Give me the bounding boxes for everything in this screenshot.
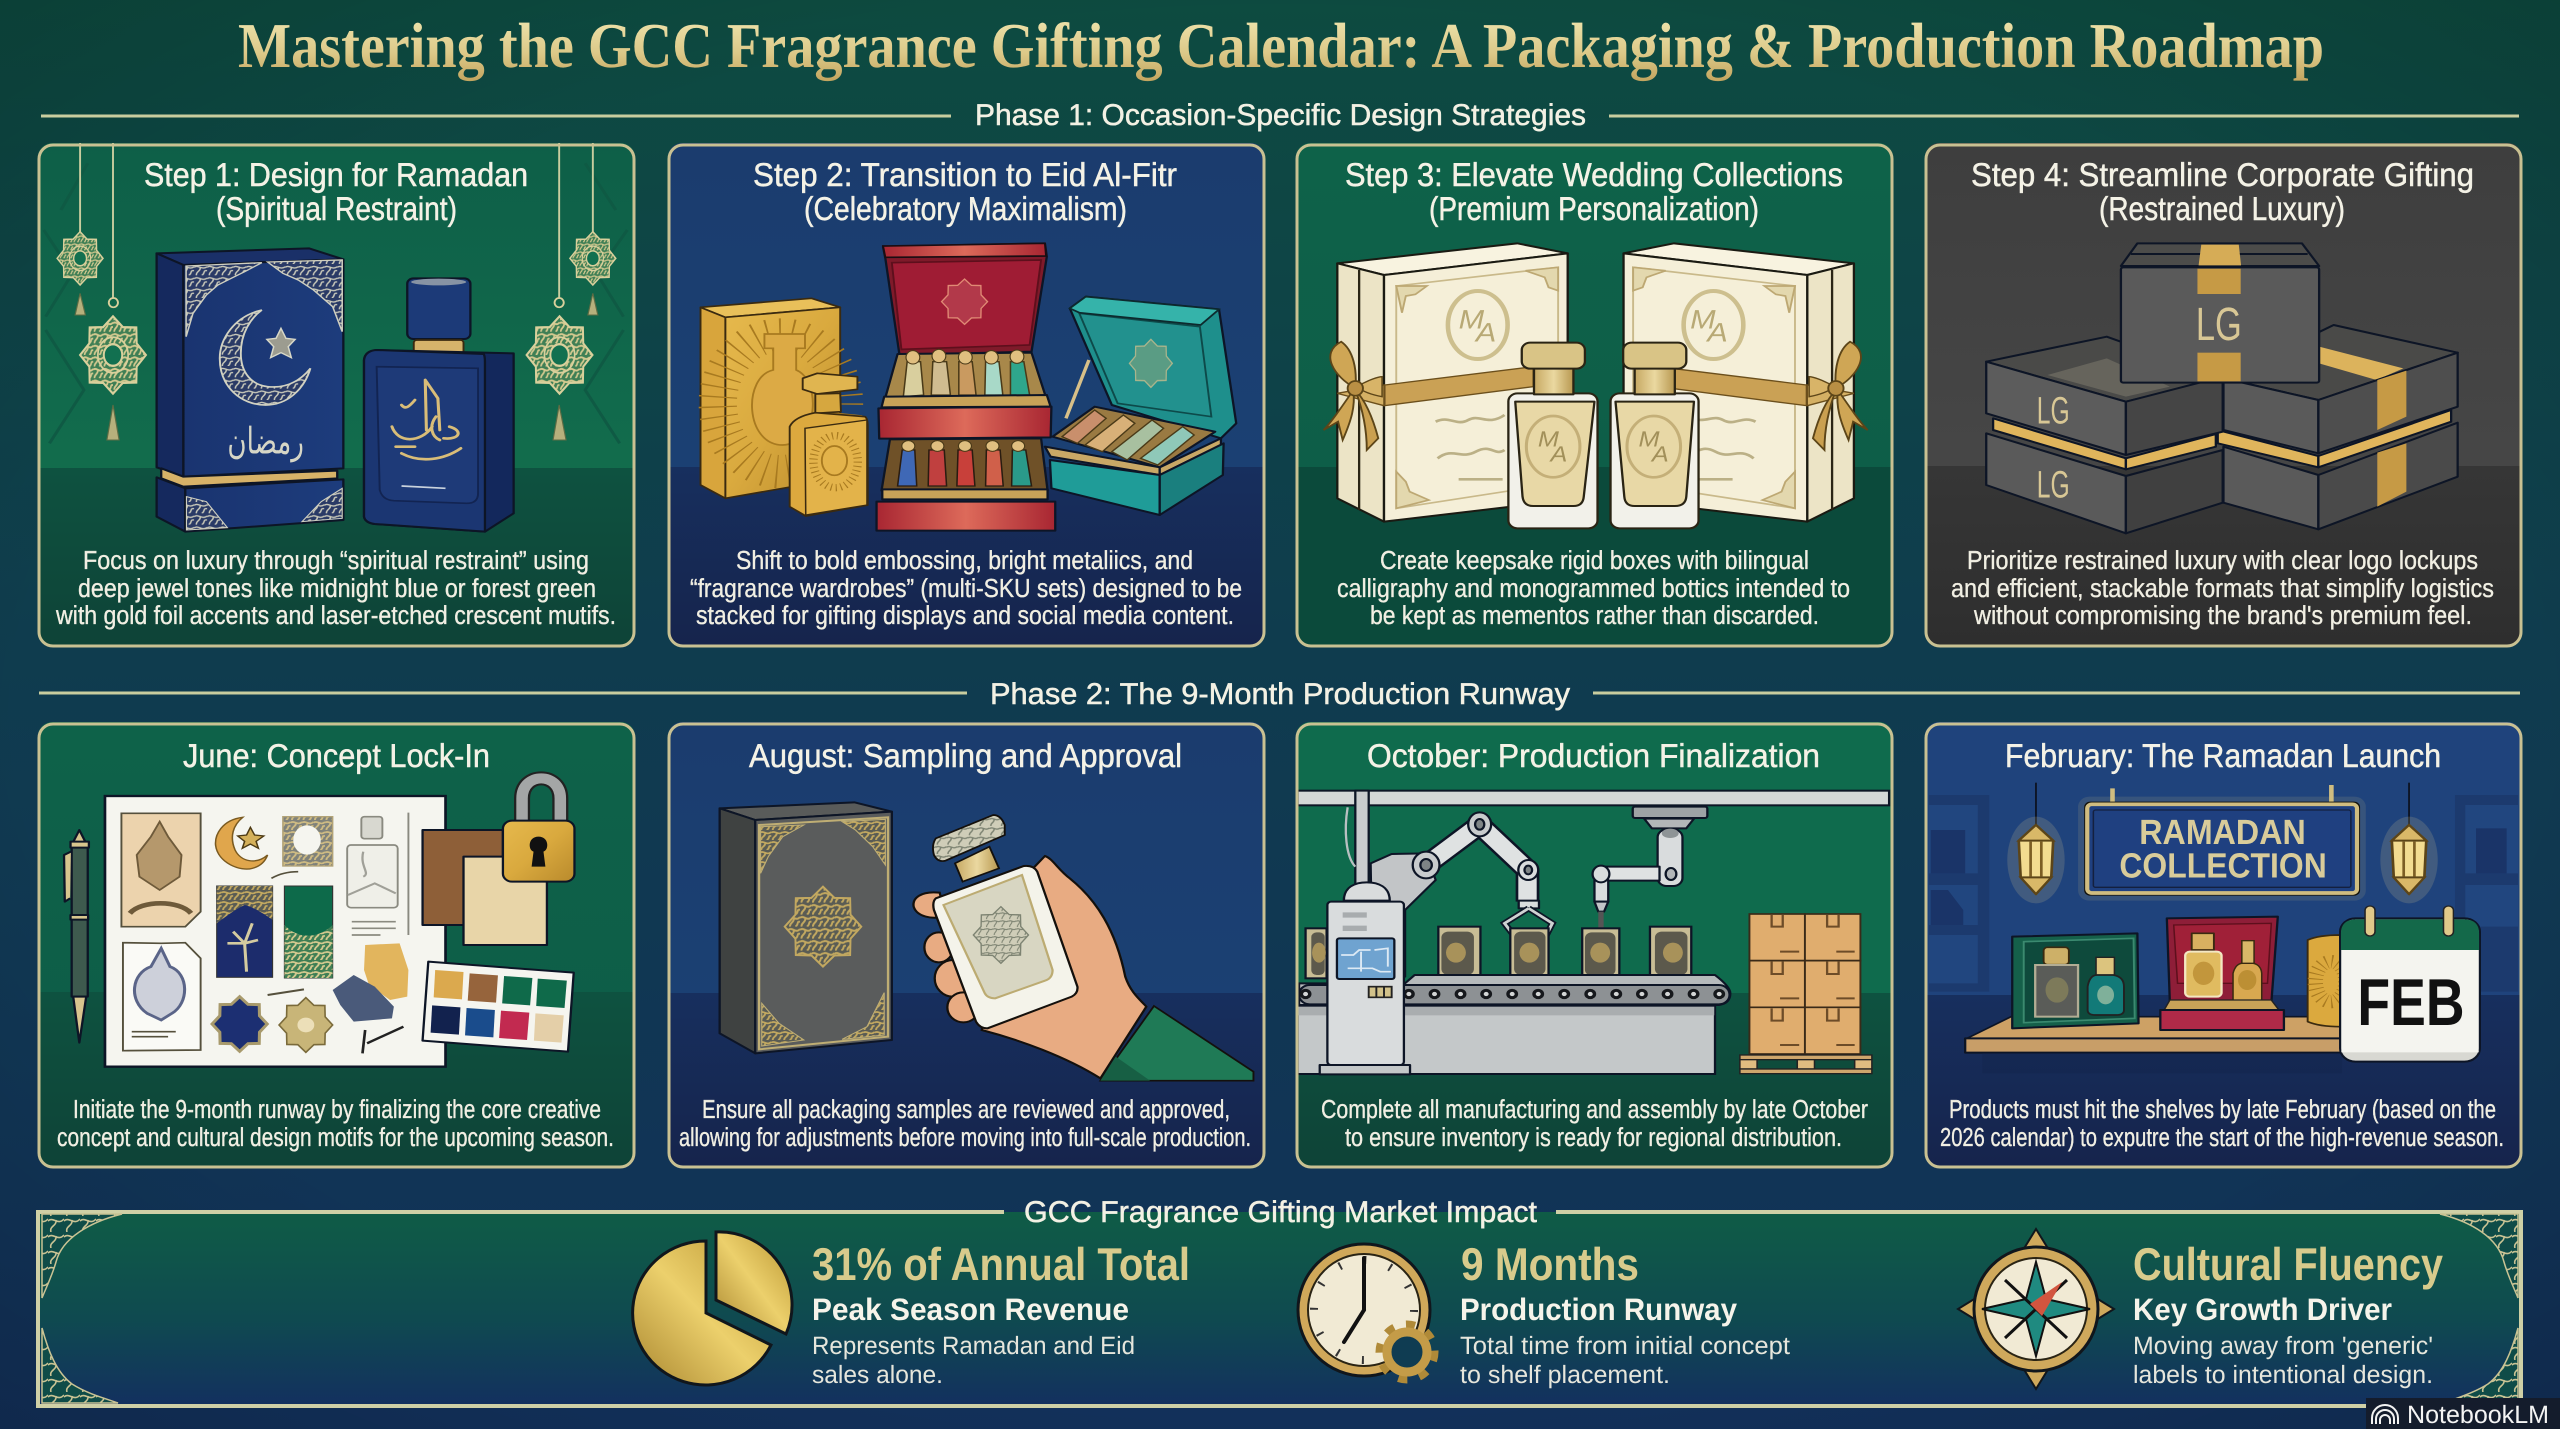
panel: market impact band	[38, 1196, 2521, 1406]
illustration: production line	[1298, 791, 1889, 1074]
text block: Shift to bold embossing, bright metaliics, and	[736, 545, 1193, 575]
stat: peak season revenue: sales alone.	[812, 1361, 943, 1389]
stat: production runway	[1460, 1238, 1790, 1389]
text block: without compromising the brand's premium feel.	[1973, 600, 2472, 630]
text block: Initiate the 9-month runway by finalizing the core creative	[73, 1094, 601, 1124]
illustration: keepsake boxes and monogram bottles: A	[1706, 318, 1728, 347]
illustration: keepsake boxes and monogram bottles: A	[1549, 442, 1567, 466]
stat: production runway: to shelf placement.	[1460, 1361, 1670, 1389]
panel: june	[38, 722, 635, 1168]
text block: Ensure all packaging samples are reviewed and approved,	[702, 1094, 1230, 1124]
sign: ramadan collection	[2085, 802, 2359, 895]
text block	[55, 545, 616, 630]
illustration: stacked black boxes: LG	[2037, 389, 2070, 432]
text block: Focus on luxury through “spiritual restraint” using	[83, 545, 589, 575]
illustration: stacked black boxes: LG	[2037, 463, 2070, 506]
text block: deep jewel tones like midnight blue or forest green	[78, 573, 596, 603]
illustration: stacked black boxes	[1986, 243, 2458, 533]
heading: (Premium Personalization)	[1429, 190, 1759, 227]
text block: be kept as mementos rather than discarded.	[1370, 600, 1819, 630]
text block	[1940, 1094, 2504, 1152]
text block: and efficient, stackable formats that simplify logistics	[1951, 573, 2494, 603]
panel: february	[1925, 722, 2522, 1168]
illustration: ramadan box and bottle: رمضان	[227, 419, 304, 462]
heading: (Celebratory Maximalism)	[804, 190, 1127, 227]
panel: october	[1296, 722, 1893, 1168]
sign: ramadan collection: COLLECTION	[2119, 846, 2327, 885]
stat: key growth driver: labels to intentional design.	[2133, 1361, 2433, 1389]
illustration: keepsake boxes and monogram bottles: A	[1650, 442, 1669, 466]
text block: concept and cultural design motifs for the upcoming season.	[57, 1122, 614, 1152]
stat: key growth driver: Cultural Fluency	[2133, 1238, 2443, 1290]
heading	[753, 156, 1177, 227]
text block: to ensure inventory is ready for regional distribution.	[1345, 1122, 1842, 1152]
heading: (Spiritual Restraint)	[216, 190, 457, 227]
stat: peak season revenue: Represents Ramadan and Eid	[812, 1332, 1135, 1360]
illustration: stacked black boxes: LG	[2196, 298, 2242, 350]
panel: step 1 ramadan	[38, 143, 635, 647]
panel: step 3 wedding	[1296, 143, 1893, 647]
text block: Complete all manufacturing and assembly by late October	[1321, 1094, 1868, 1124]
text block: Prioritize restrained luxury with clear logo lockups	[1967, 545, 2478, 575]
watermark: notebooklm	[2366, 1398, 2560, 1429]
heading: October: Production Finalization	[1367, 737, 1820, 774]
illustration: keepsake boxes and monogram bottles: M	[1690, 304, 1716, 334]
icon: pie chart	[633, 1232, 792, 1385]
illustration: ramadan box and bottle	[44, 143, 627, 532]
heading	[1345, 156, 1843, 227]
text block	[690, 545, 1242, 630]
icon: compass	[1958, 1229, 2114, 1389]
title: Mastering the GCC Fragrance Gifting Calendar: A Packaging & Production Roadmap	[238, 10, 2324, 82]
text block: allowing for adjustments before moving into full-scale production.	[679, 1122, 1251, 1152]
stat: peak season revenue: 31% of Annual Total	[812, 1238, 1190, 1290]
illustration: gold box, red stacked box, teal box	[701, 243, 1236, 531]
illustration: ramadan shelf and FEB calendar: FEB	[2357, 965, 2465, 1039]
illustration: ramadan shelf and FEB calendar	[1929, 783, 2518, 1073]
heading: Step 1: Design for Ramadan	[144, 156, 528, 193]
illustration: keepsake boxes and monogram bottles: A	[1474, 318, 1496, 347]
panel: august	[668, 722, 1265, 1168]
text block	[679, 1094, 1251, 1152]
heading: February: The Ramadan Launch	[2005, 737, 2441, 774]
stat: peak season revenue	[812, 1238, 1190, 1389]
illustration: moodboard, lock, swatches, pen	[64, 778, 574, 1067]
stat: key growth driver: Key Growth Driver	[2133, 1292, 2392, 1327]
watermark: notebooklm: NotebookLM	[2407, 1401, 2549, 1429]
heading	[144, 156, 528, 227]
illustration: keepsake boxes and monogram bottles	[1324, 243, 1868, 528]
illustration: keepsake boxes and monogram bottles: M	[1638, 427, 1660, 451]
illustration: sample box and hand holding bottle	[720, 802, 1253, 1081]
heading: GCC Fragrance Gifting Market Impact	[1024, 1196, 1538, 1229]
text block: Create keepsake rigid boxes with bilingual	[1380, 545, 1809, 575]
text block: calligraphy and monogrammed bottics intended to	[1337, 573, 1850, 603]
stat: production runway: Total time from initial concept	[1460, 1332, 1790, 1360]
heading: Step 2: Transition to Eid Al-Fitr	[753, 156, 1177, 193]
panel: step 4 corporate	[1925, 143, 2522, 647]
icon: clock with gear	[1298, 1244, 1434, 1379]
panel: step 2 eid	[668, 143, 1265, 647]
heading: Step 3: Elevate Wedding Collections	[1345, 156, 1843, 193]
stat: peak season revenue: Peak Season Revenue	[812, 1292, 1129, 1327]
stat: production runway: Production Runway	[1460, 1292, 1738, 1327]
heading: phase 2: Phase 2: The 9-Month Production Runway	[990, 678, 1570, 711]
text block	[1337, 545, 1850, 630]
text block: “fragrance wardrobes” (multi-SKU sets) designed to be	[690, 573, 1242, 603]
heading: August: Sampling and Approval	[749, 737, 1182, 774]
stat: key growth driver	[2133, 1238, 2443, 1389]
heading: (Restrained Luxury)	[2099, 190, 2345, 227]
text block: with gold foil accents and laser-etched crescent mutifs.	[55, 600, 616, 630]
text block: stacked for gifting displays and social media content.	[696, 600, 1234, 630]
illustration: keepsake boxes and monogram bottles: M	[1538, 427, 1559, 451]
text block	[57, 1094, 614, 1152]
ornament: band corners	[42, 1214, 2518, 1403]
illustration: keepsake boxes and monogram bottles: M	[1459, 304, 1484, 334]
stat: key growth driver: Moving away from 'generic'	[2133, 1332, 2433, 1360]
heading: Step 4: Streamline Corporate Gifting	[1971, 156, 2474, 193]
heading	[1971, 156, 2474, 227]
sign: ramadan collection: RAMADAN	[2139, 813, 2306, 852]
heading: June: Concept Lock-In	[183, 737, 490, 774]
stat: production runway: 9 Months	[1461, 1238, 1639, 1290]
text block	[1951, 545, 2494, 630]
text block	[1321, 1094, 1868, 1152]
heading: phase 1: Phase 1: Occasion-Specific Design Strategies	[975, 99, 1586, 132]
